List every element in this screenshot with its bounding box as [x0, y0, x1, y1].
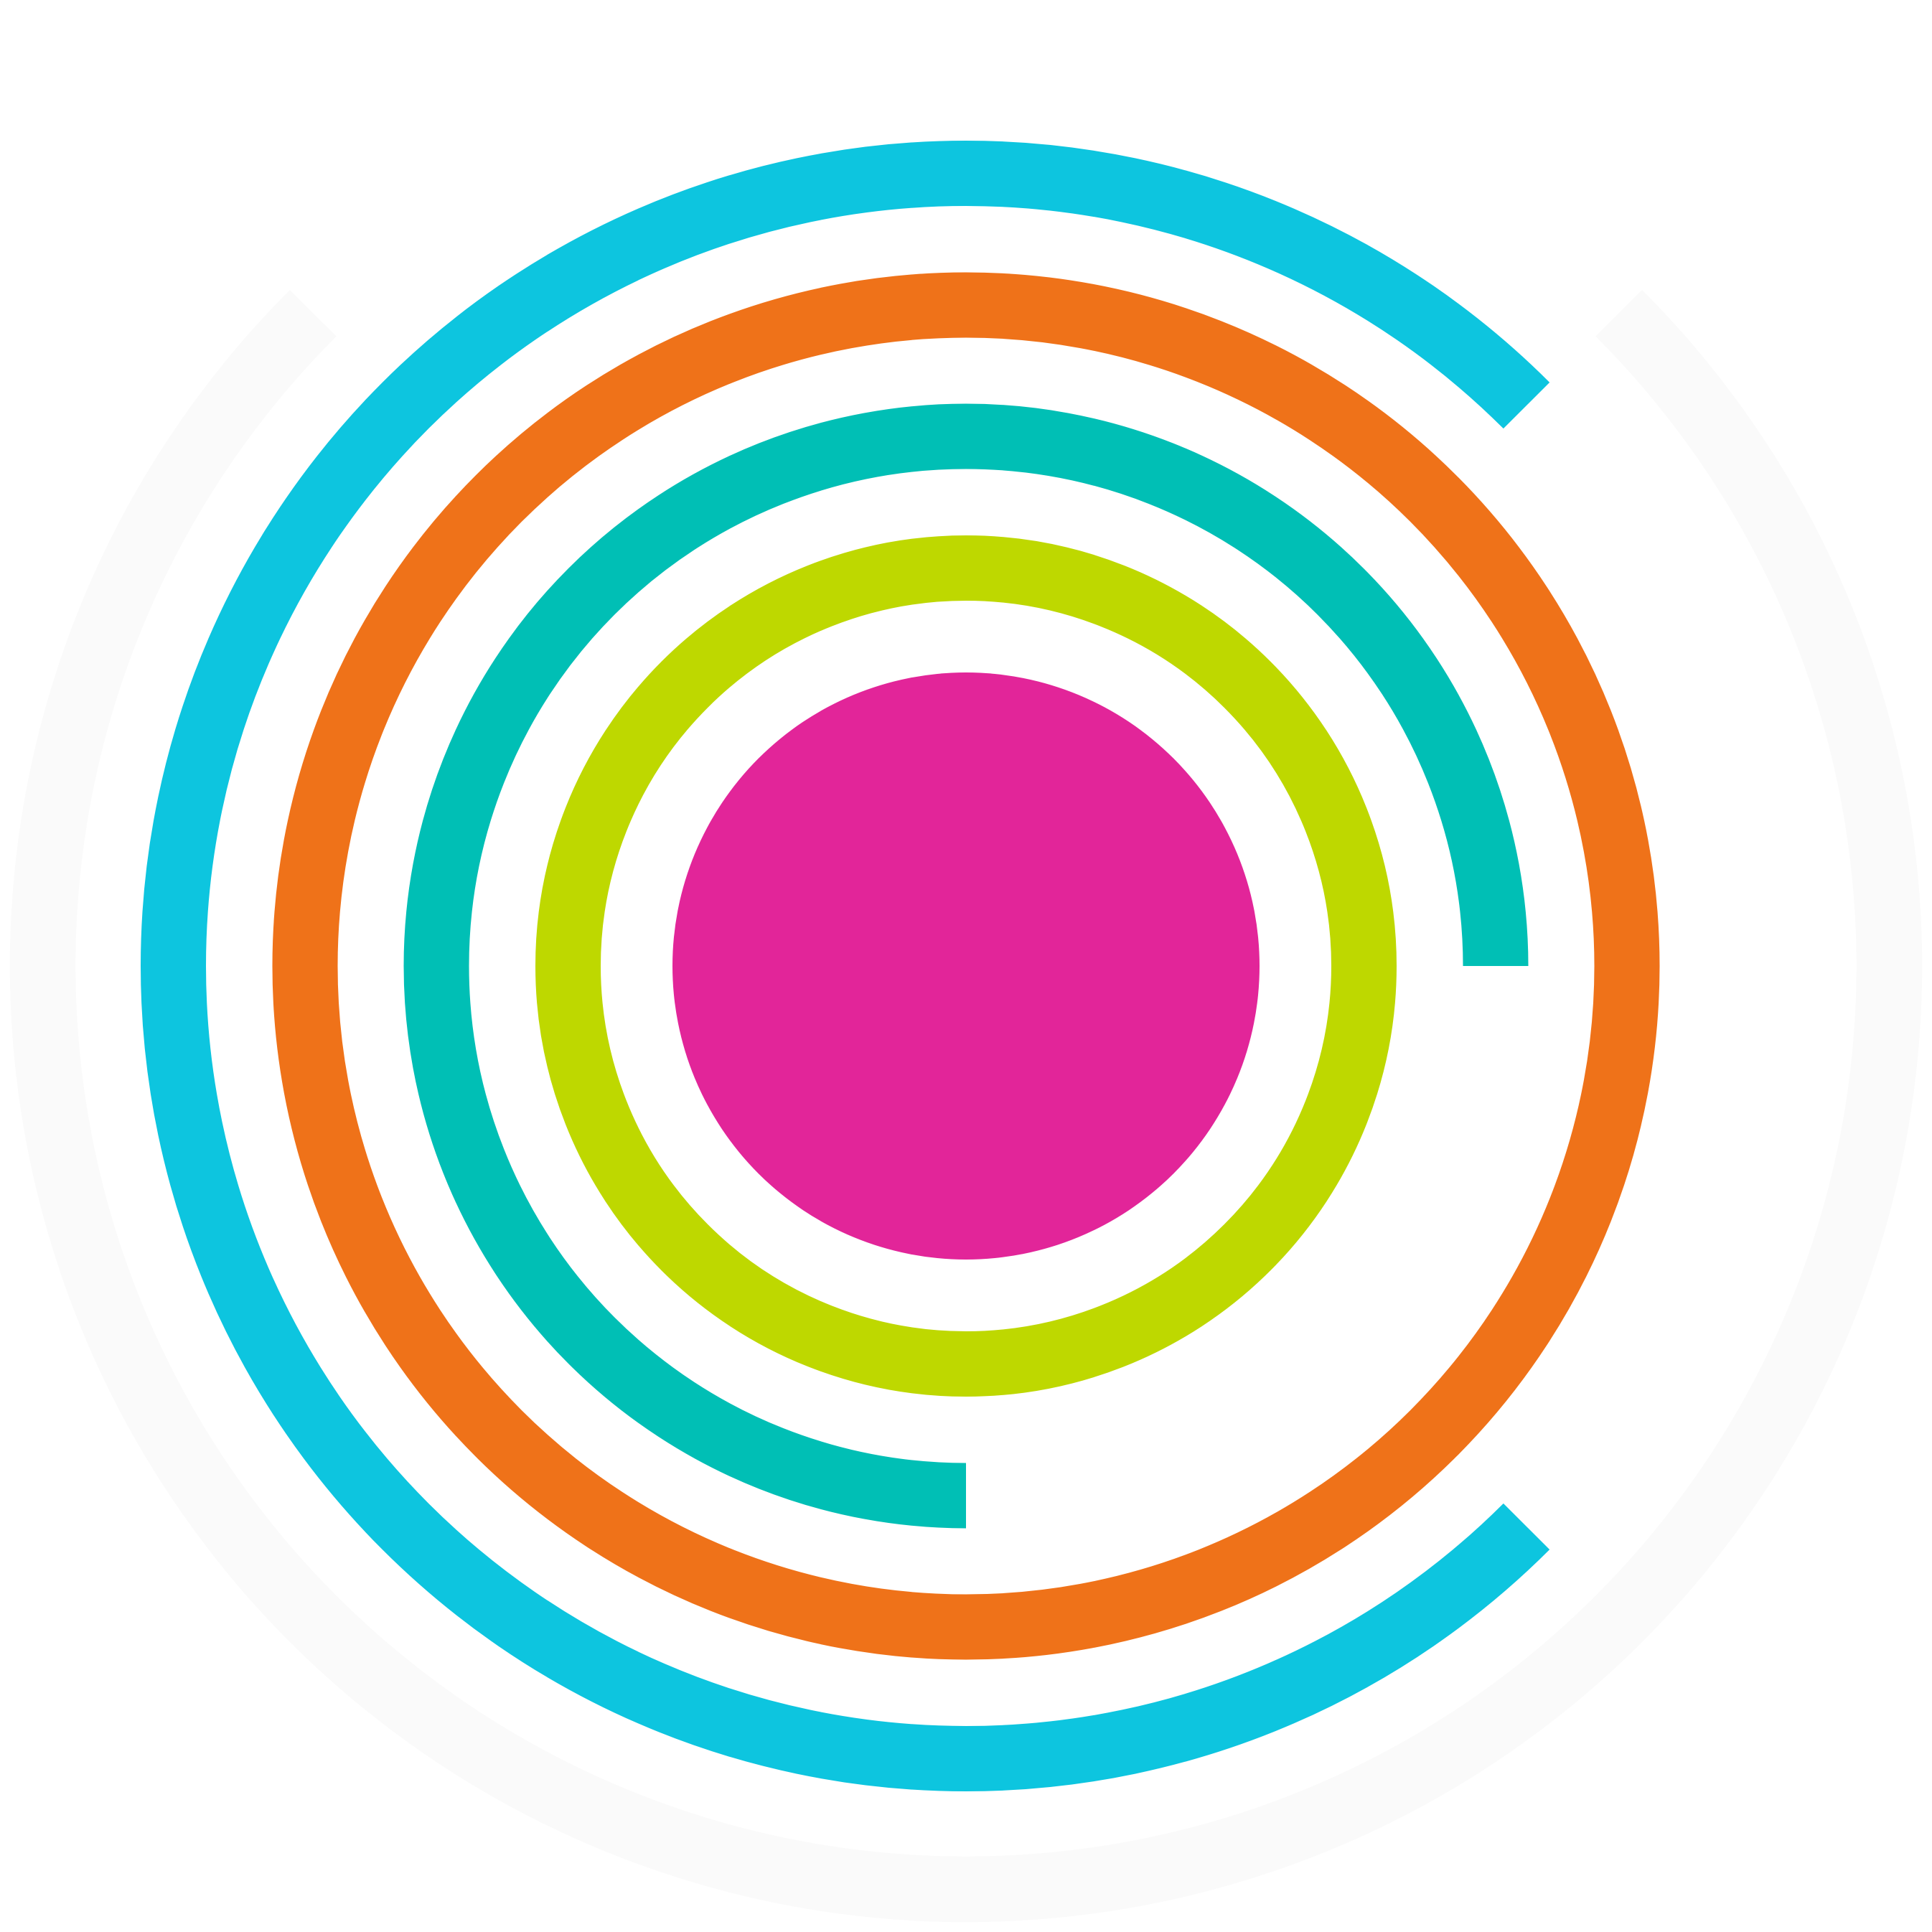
magenta centre disc	[672, 672, 1260, 1260]
orange full ring	[305, 305, 1627, 1627]
outer pale grey arc, open at the top	[42, 313, 1890, 1889]
lime green full ring	[568, 568, 1364, 1364]
cyan arc, open on the right	[174, 173, 1527, 1758]
teal three-quarter arc, open at the lower right	[436, 436, 1496, 1496]
